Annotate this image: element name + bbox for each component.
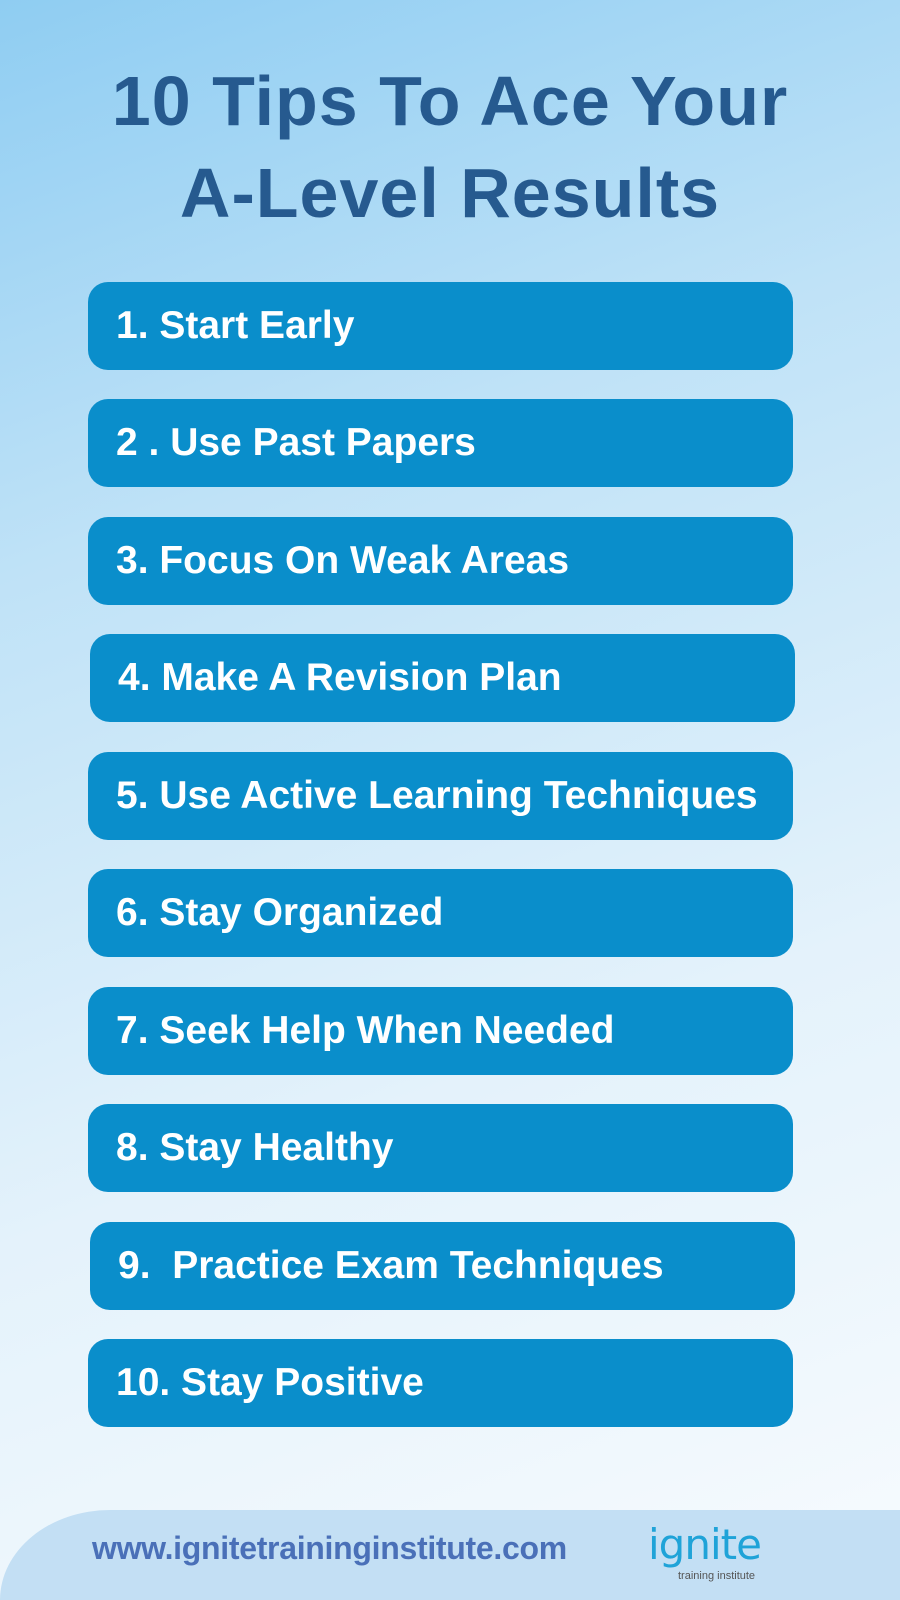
tip 4 — [90, 634, 795, 722]
logo: training institute — [678, 1570, 755, 1582]
title — [112, 62, 788, 232]
tip 9: 9. Practice Exam Techniques — [118, 1244, 664, 1287]
tip 2: 2 . Use Past Papers — [116, 421, 476, 464]
tip 1: 1. Start Early — [116, 304, 354, 347]
tip 3: 3. Focus On Weak Areas — [116, 539, 569, 582]
tip 1 — [88, 282, 793, 370]
tip 6 — [88, 869, 793, 957]
tip 4: 4. Make A Revision Plan — [118, 656, 562, 699]
tip 8: 8. Stay Healthy — [116, 1126, 393, 1169]
tip 6: 6. Stay Organized — [116, 891, 443, 934]
footer band — [0, 1510, 900, 1600]
title: 10 Tips To Ace Your — [112, 62, 788, 140]
tip 9 — [90, 1222, 795, 1310]
website url: www.ignitetraininginstitute.com — [92, 1530, 567, 1566]
title: A-Level Results — [180, 154, 720, 232]
tip 10: 10. Stay Positive — [116, 1361, 424, 1404]
tip 7 — [88, 987, 793, 1075]
tip 2 — [88, 399, 793, 487]
tip 5 — [88, 752, 793, 840]
tip 8 — [88, 1104, 793, 1192]
tip 7: 7. Seek Help When Needed — [116, 1009, 614, 1052]
tip 10 — [88, 1339, 793, 1427]
logo: ignite — [648, 1520, 761, 1569]
tip 3 — [88, 517, 793, 605]
tip 5: 5. Use Active Learning Techniques — [116, 774, 758, 817]
